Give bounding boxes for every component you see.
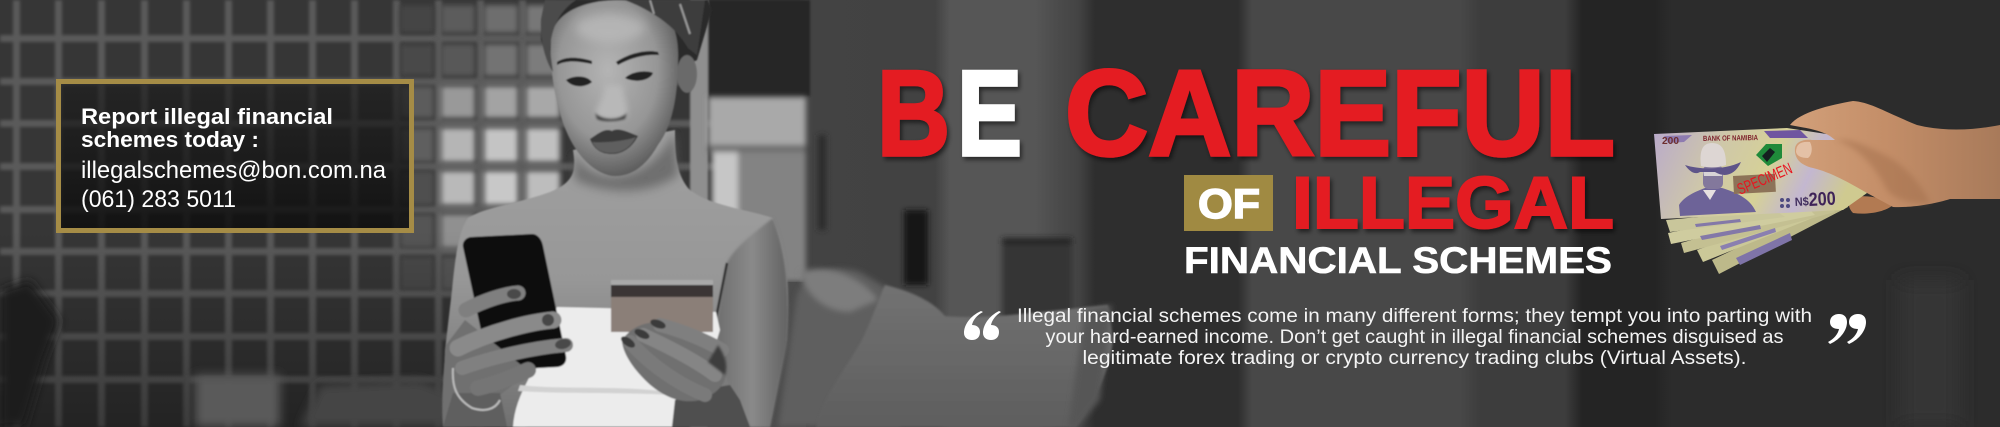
of badge xyxy=(1184,175,1273,231)
right arm shading xyxy=(716,218,788,427)
portrait xyxy=(1679,143,1756,216)
icon: opening quote mark xyxy=(964,311,1001,340)
bank name: BANK OF NAMIBIA xyxy=(1703,133,1758,143)
hand on phone xyxy=(442,289,572,427)
forehead highlight xyxy=(575,14,645,42)
title: be careful: CAREFUL xyxy=(1065,45,1615,181)
lower fingers xyxy=(1849,196,1893,214)
note value: N$ xyxy=(1794,194,1809,209)
eyes xyxy=(566,76,592,86)
report heading: schemes today : xyxy=(81,127,259,152)
quote text xyxy=(1017,305,1812,369)
title: be careful: B xyxy=(877,45,950,181)
fanned banknotes xyxy=(1666,198,1848,274)
room right side wall xyxy=(806,0,2000,427)
building vignette xyxy=(1733,174,1776,194)
of badge: OF xyxy=(1198,180,1260,227)
sofa pillows xyxy=(778,269,1113,427)
dark door and picture details xyxy=(818,135,1072,358)
glass block wall xyxy=(0,0,800,427)
contact details: illegalschemes@bon.com.na xyxy=(81,157,387,184)
icon: closing quote mark xyxy=(1828,314,1866,344)
denomination corner: 200 xyxy=(1662,136,1679,147)
phone xyxy=(463,234,566,370)
hand shadow xyxy=(1835,140,1930,203)
hand holding banknotes xyxy=(1654,101,2000,274)
nails xyxy=(507,289,521,299)
nails xyxy=(649,318,667,330)
arm and hand xyxy=(1790,101,2000,207)
report panel xyxy=(58,82,412,230)
woman holding phone and card xyxy=(442,0,788,427)
head wrap back xyxy=(541,0,712,70)
wall behind right of woman xyxy=(690,0,810,427)
bright glass blocks xyxy=(400,5,560,290)
specimen stamp: SPECIMEN xyxy=(1735,160,1795,199)
neck shadow xyxy=(573,130,678,191)
lips xyxy=(590,130,638,154)
title: be careful: E xyxy=(957,45,1022,181)
nose xyxy=(596,85,627,120)
report heading xyxy=(81,104,333,152)
ear xyxy=(677,55,697,93)
report heading: Report illegal financial xyxy=(81,104,333,129)
eyebrows xyxy=(557,58,592,65)
thumbnail xyxy=(1796,142,1812,158)
forearm and hand on card xyxy=(619,318,750,427)
quote text: Illegal financial schemes come in many different forms; they tempt you into parting with xyxy=(1017,305,1812,327)
bracelet xyxy=(453,368,500,410)
title: illegal: ILLEGAL xyxy=(1292,163,1614,244)
contact details xyxy=(81,157,387,213)
hologram patch xyxy=(1756,144,1782,166)
contact details: (061) 283 5011 xyxy=(81,186,236,213)
top banknote: 200 xyxy=(1808,189,1836,211)
head wrap band xyxy=(541,0,576,72)
quote text: legitimate forex trading or crypto currency trading clubs (Virtual Assets). xyxy=(1082,347,1746,369)
left darkening and plant xyxy=(0,230,500,427)
neck and torso xyxy=(443,130,788,427)
title: financial schemes: FINANCIAL SCHEMES xyxy=(1184,240,1612,281)
dress xyxy=(513,307,720,427)
face xyxy=(551,0,678,176)
bank card xyxy=(611,280,713,332)
top banknote xyxy=(1654,128,1867,219)
blurred sofa left xyxy=(195,375,470,427)
arm crease xyxy=(715,263,727,323)
quote text: your hard-earned income. Don’t get caught in illegal financial schemes disguised as xyxy=(1046,326,1784,348)
